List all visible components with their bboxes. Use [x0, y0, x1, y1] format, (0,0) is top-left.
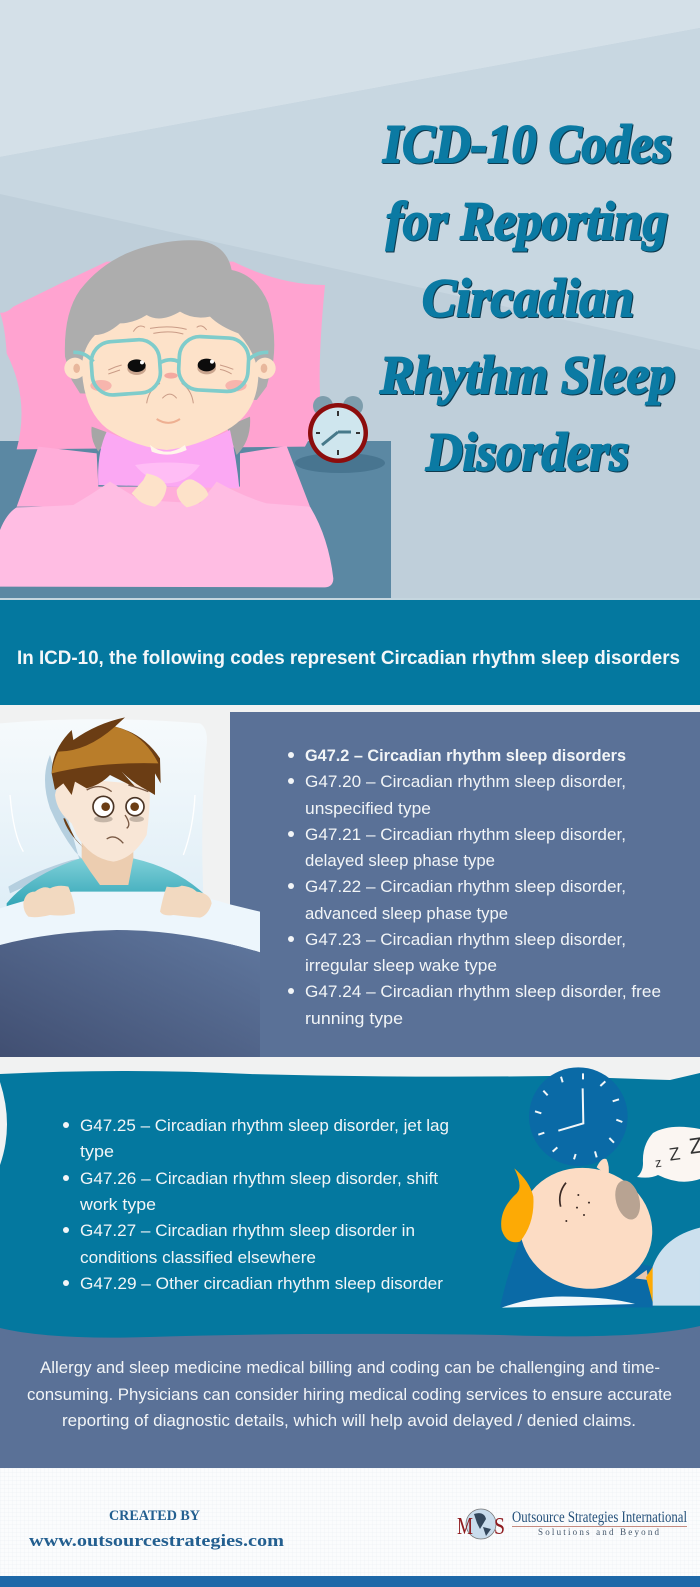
intro text: In ICD-10, the following codes represent Circadian rhythm sleep disorders	[17, 648, 680, 669]
panel: footer	[0, 1468, 700, 1576]
second codes list: G47.27 – Circadian rhythm sleep disorder in	[80, 1222, 415, 1240]
second codes list: G47.25 – Circadian rhythm sleep disorder, jet lag	[80, 1117, 449, 1135]
title: ICD-10 Codes	[382, 114, 672, 174]
panel: hero background	[0, 0, 700, 600]
title: for Reporting	[386, 191, 668, 251]
first codes list	[288, 747, 661, 1028]
icon: alarm clock	[295, 396, 385, 473]
panel: second codes wavy background	[0, 1071, 700, 1338]
logo: S	[494, 1514, 505, 1540]
closing paragraph: consuming. Physicians can consider hiring medical coding services to ensure accurate	[27, 1386, 672, 1404]
panel: intro band	[0, 600, 700, 705]
icon: speech bubble with snoring letters: Z	[668, 1143, 681, 1165]
first codes list: advanced sleep phase type	[305, 905, 508, 923]
logo: M	[457, 1514, 473, 1540]
icon: elderly woman in bed	[0, 240, 333, 587]
closing paragraph: reporting of diagnostic details, which will help avoid delayed / denied claims.	[62, 1412, 636, 1430]
second codes list	[63, 1117, 449, 1293]
closing paragraph: Allergy and sleep medicine medical billing and coding can be challenging and time-	[40, 1359, 660, 1377]
title: Rhythm Sleep	[379, 345, 675, 405]
title: Disorders	[425, 422, 629, 482]
first codes list: irregular sleep wake type	[305, 957, 497, 975]
panel: bedside table	[0, 441, 391, 598]
bullets	[288, 752, 294, 994]
panel: first codes background	[230, 712, 700, 1057]
second codes list: G47.29 – Other circadian rhythm sleep disorder	[80, 1275, 444, 1293]
first codes list: unspecified type	[305, 800, 431, 818]
title: Circadian	[422, 268, 634, 328]
first codes list: G47.21 – Circadian rhythm sleep disorder,	[305, 826, 626, 844]
first codes list: G47.24 – Circadian rhythm sleep disorder, free	[305, 983, 661, 1001]
first codes list: G47.2 – Circadian rhythm sleep disorders	[305, 747, 626, 765]
first codes list: G47.22 – Circadian rhythm sleep disorder,	[305, 878, 626, 896]
second codes list: G47.26 – Circadian rhythm sleep disorder, shift	[80, 1170, 438, 1188]
second codes list: type	[80, 1143, 114, 1161]
first codes list: G47.20 – Circadian rhythm sleep disorder,	[305, 773, 626, 791]
bullets	[63, 1122, 69, 1286]
created by: CREATED BY	[109, 1508, 200, 1524]
second codes list: conditions classified elsewhere	[80, 1249, 316, 1267]
closing paragraph	[27, 1359, 672, 1430]
website url: www.outsourcestrategies.com	[29, 1531, 284, 1550]
icon: man awake in bed	[0, 717, 260, 1057]
first codes list: running type	[305, 1010, 403, 1028]
logo: Solutions and Beyond	[538, 1527, 660, 1537]
title	[379, 114, 675, 482]
icon: speech bubble with snoring letters	[637, 1127, 700, 1182]
logo	[457, 1509, 687, 1540]
panel: bottom paragraph background	[0, 1300, 700, 1468]
first codes list: G47.23 – Circadian rhythm sleep disorder,	[305, 931, 626, 949]
second codes list: work type	[79, 1196, 156, 1214]
bottom bar	[0, 1576, 700, 1587]
first codes list: delayed sleep phase type	[305, 852, 495, 870]
icon: speech bubble with snoring letters: z	[654, 1155, 662, 1170]
icon: sleeping person and clock	[500, 1067, 700, 1308]
